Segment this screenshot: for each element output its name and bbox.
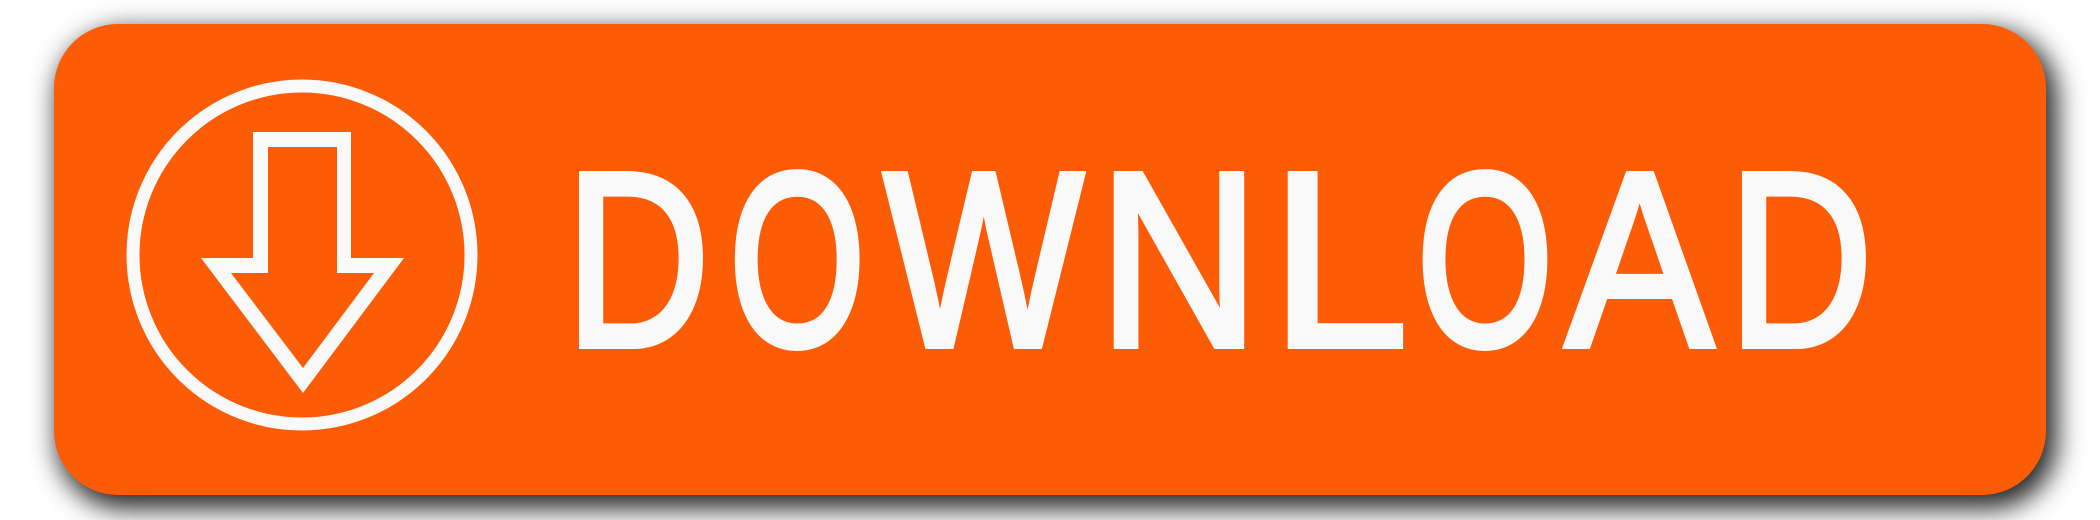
title: DOWNLOAD: O (1418, 123, 1552, 396)
title: DOWNLOAD: W (884, 120, 1083, 398)
icon: down arrow outline (201, 132, 404, 393)
title: DOWNLOAD (565, 120, 1873, 399)
title: DOWNLOAD: A (1566, 120, 1713, 398)
title: DOWNLOAD: L (1271, 121, 1408, 399)
icon: download arrow in circle (133, 86, 471, 424)
icon: circle ring (133, 86, 471, 424)
title: DOWNLOAD: D (1728, 121, 1873, 398)
title: DOWNLOAD: O (730, 123, 865, 396)
title: DOWNLOAD: N (1099, 121, 1259, 398)
title: DOWNLOAD: D (565, 121, 710, 398)
